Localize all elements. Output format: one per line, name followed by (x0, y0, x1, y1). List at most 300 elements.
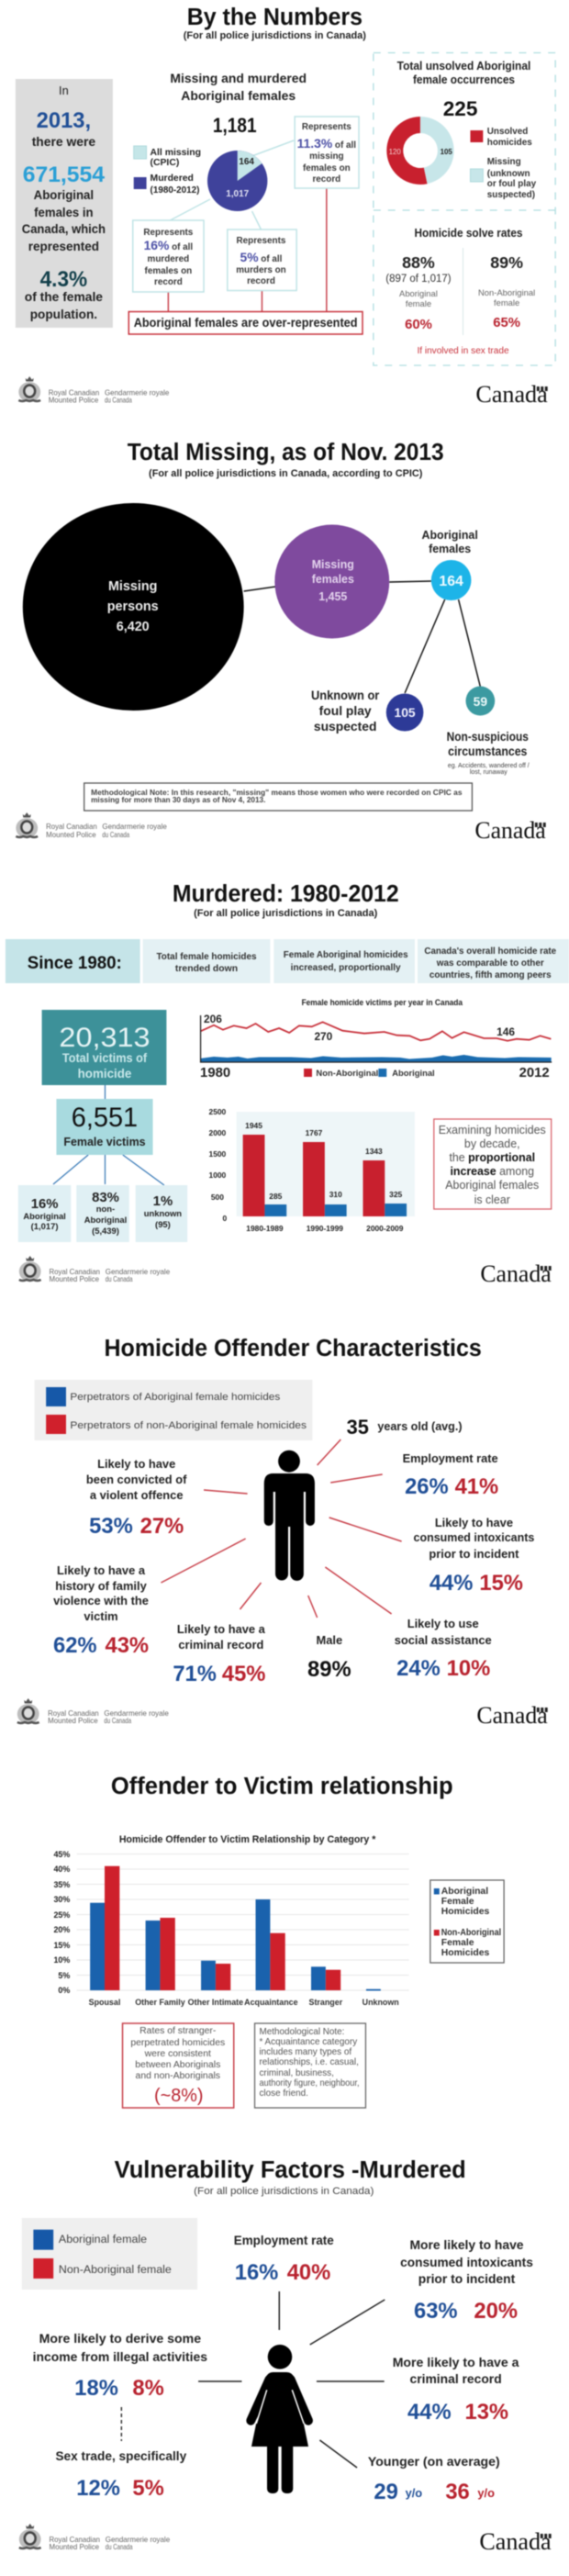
box: total victims: homicide (78, 1067, 132, 1081)
homicide solve rates: Aboriginal (399, 289, 438, 299)
callout: proportional increase (434, 1119, 552, 1209)
callout: proportional increase: increase among (450, 1165, 534, 1178)
logo: RCMP: du Canada (106, 1275, 133, 1283)
box: 16% aboriginal: 16% (31, 1196, 58, 1212)
stat: intoxicants: 15% (479, 1571, 523, 1596)
homicide solve rates (385, 227, 535, 356)
banner: trended down: Total female homicides (156, 952, 257, 962)
banner: increased: increased, proportionally (291, 963, 401, 973)
donut chart (386, 117, 454, 185)
stat: illegal income: 8% (132, 2376, 164, 2401)
donut legend: (unknown (487, 169, 530, 179)
stat: family violence: Likely to have a (57, 1563, 146, 1577)
subtitle: (For all police jurisdictions in Canada) (184, 30, 366, 41)
donut legend (470, 127, 537, 200)
bar chart (209, 1107, 415, 1233)
line chart: Female homicide victims per year in Canada (302, 998, 463, 1007)
callout: 11.3%: record (312, 174, 340, 185)
bar chart: 35% (53, 1880, 70, 1889)
logo: RCMP: Royal Canadian (48, 1709, 99, 1718)
bar chart: 285 (269, 1192, 283, 1201)
bar chart: Homicide Offender to Victim Relationship by Category * (119, 1834, 376, 1845)
chart legend: Non-Aboriginal (441, 1928, 501, 1938)
homicide solve rates: (897 of 1,017) (385, 272, 452, 285)
dotted link (120, 2407, 122, 2441)
stat: illegal income (33, 2331, 207, 2401)
box: 83% non-aboriginal: Aboriginal (84, 1215, 127, 1226)
homicide solve rates: 89% (490, 253, 523, 272)
stat: intoxicants: prior to incident (418, 2271, 516, 2286)
bar chart: 2500 (209, 1107, 227, 1116)
chart legend: Aboriginal (441, 1887, 488, 1897)
callout: 5%: 5% of all (240, 250, 283, 264)
stat: illegal income: 18% (74, 2376, 118, 2401)
bar chart: 1990-1999 (307, 1224, 343, 1233)
circle: foul play: foul play (319, 703, 372, 718)
legend: Perpetrators of non-Aboriginal female homicides (70, 1420, 307, 1431)
circle: missing females (274, 525, 389, 639)
pie chart: 1,017 (226, 189, 250, 199)
line chart: Non-Aboriginal (316, 1069, 378, 1079)
stat: employment: 26% (405, 1474, 449, 1499)
logo: RCMP: Royal Canadian (50, 2536, 100, 2544)
circle: aboriginal females: Aboriginal (422, 529, 478, 542)
box: 83% non-aboriginal: (5,439) (92, 1226, 119, 1237)
stat: criminal record (393, 2355, 519, 2425)
stat: employment: 40% (287, 2260, 330, 2285)
stat: age: y/o (406, 2486, 422, 2500)
line chart: 146 (496, 1025, 515, 1038)
circle: missing females: females (312, 573, 354, 586)
logo: RCMP: Mounted Police (50, 2543, 100, 2551)
methodological note (255, 2023, 365, 2108)
panel: unsolved occurrences (374, 53, 555, 365)
stat: age: y/o (477, 2486, 495, 2500)
methodological note: includes many types of (259, 2047, 351, 2057)
bar chart: 1000 (209, 1170, 227, 1180)
stat: age: 29 (374, 2480, 398, 2504)
bar chart: 2000-2009 (366, 1224, 404, 1233)
logo: Canada: Canada (479, 2528, 552, 2555)
callout: proportional increase: by decade, (464, 1137, 520, 1150)
section: murdered (6, 881, 569, 1287)
callout: stranger rates: were consistent (144, 2049, 211, 2059)
logo: RCMP: Gendarmerie royale (106, 1268, 171, 1276)
line chart: Aboriginal (392, 1069, 435, 1079)
methodological note: Methodological Note: (259, 2027, 344, 2037)
box: 1% unknown: (95) (155, 1220, 171, 1230)
banner: overall rate: was comparable to other (436, 958, 544, 969)
stat: intoxicants: More likely to have (409, 2237, 524, 2252)
circle: non-suspicious: lost, runaway (470, 769, 508, 776)
tree connectors (53, 1085, 164, 1185)
stat: family violence: 43% (105, 1633, 149, 1658)
stat: sex trade (55, 2448, 186, 2501)
connector lines (244, 581, 480, 693)
logo: RCMP: Gendarmerie royale (102, 823, 167, 831)
icon: female figure (251, 2345, 308, 2493)
bar chart: 1945 (245, 1121, 262, 1130)
stat: criminal record: 71% (173, 1662, 217, 1686)
logo: RCMP: du Canada (104, 1717, 132, 1725)
callout: stranger rates: perpetrated homicides (130, 2038, 225, 2048)
box: 16% aboriginal: Aboriginal (23, 1212, 66, 1222)
methodological note: Methodological Note: In this research, "missing" means those women who were recorded on CPIC as (91, 788, 463, 797)
bar chart: 0% (58, 1986, 70, 1995)
bar chart: Acquaintance (244, 1998, 298, 2007)
panel: population: females in (34, 206, 94, 219)
pie chart (207, 151, 267, 211)
box: total victims (42, 1010, 166, 1085)
chart legend: Homicides (441, 1948, 489, 1958)
methodological note: relationships, i.e. casual, (259, 2057, 359, 2067)
bar chart: 1767 (306, 1128, 323, 1137)
subtitle: (For all police jurisdictions in Canada) (194, 2186, 374, 2197)
callout: stranger rates: Rates of stranger- (139, 2026, 217, 2036)
box: 16% aboriginal: (1,017) (31, 1222, 58, 1232)
homicide solve rates: 60% (405, 317, 432, 332)
methodological note: authority figure, neighbour, (259, 2078, 360, 2089)
stat: family violence (53, 1563, 149, 1658)
stat: intoxicants: prior to incident (429, 1547, 519, 1561)
chart legend (430, 1880, 504, 1963)
circle: non-suspicious: Non-suspicious (447, 730, 529, 744)
bar chart: 325 (389, 1190, 402, 1199)
circle: missing persons (23, 503, 244, 711)
donut legend: Missing (487, 157, 521, 167)
box: total victims: Total victims of (62, 1051, 148, 1065)
box: 83% non-aboriginal (76, 1185, 129, 1242)
circle: missing persons: 6,420 (117, 620, 150, 634)
stat: criminal record: 44% (407, 2400, 452, 2425)
methodological note: close friend. (259, 2089, 308, 2099)
stat: sex trade: Sex trade, specifically (55, 2448, 186, 2463)
stat: employment: 16% (235, 2260, 278, 2285)
banner: overall rate: countries, fifth among peers (430, 970, 552, 980)
stat: employment: Employment rate (403, 1451, 498, 1465)
subtitle: (For all police jurisdictions in Canada) (194, 908, 378, 919)
panel: population: represented (28, 240, 99, 253)
total 1,181: 1,181 (213, 114, 257, 137)
logo: RCMP: Royal Canadian (46, 823, 97, 831)
callout: 16%: Represents (143, 228, 194, 238)
chart legend: Female (441, 1938, 474, 1948)
circle: non-suspicious (447, 687, 530, 776)
stat: violent offence: a violent offence (90, 1488, 184, 1502)
logo: RCMP: Mounted Police (50, 1275, 100, 1283)
stat: violent offence: been convicted of (86, 1473, 187, 1486)
pie legend: Murdered (151, 174, 194, 184)
circle: aboriginal females: 164 (439, 574, 463, 589)
bar chart: 30% (53, 1895, 70, 1904)
pie legend (134, 146, 201, 196)
methodological note: * Acquaintance category (259, 2037, 357, 2047)
logo: RCMP: du Canada (106, 2543, 133, 2551)
homicide solve rates: 65% (493, 315, 520, 330)
logo: RCMP (19, 1256, 171, 1283)
circle: non-suspicious: circumstances (448, 745, 527, 758)
logo: RCMP: Gendarmerie royale (105, 389, 170, 398)
stat: social assistance (395, 1617, 492, 1681)
methodological note (84, 783, 472, 811)
box: female victims: Female victims (63, 1135, 146, 1148)
stat: employment (403, 1451, 498, 1499)
bar chart: Other Intimate (188, 1998, 243, 2007)
logo: RCMP: du Canada (102, 831, 130, 839)
bar chart: 20% (53, 1925, 70, 1934)
heading: missing and murdered: Missing and murdered (170, 71, 307, 85)
box: 1% unknown: 1% (153, 1193, 173, 1209)
banner: overall rate (418, 939, 569, 983)
connector lines (198, 2291, 385, 2468)
connector lines (161, 1439, 402, 1618)
stat: intoxicants: Likely to have (435, 1516, 513, 1529)
panel: population: there were (32, 135, 96, 149)
bar chart: 5% (58, 1971, 70, 1980)
stat: illegal income: income from illegal activities (33, 2349, 207, 2364)
stat: criminal record: 13% (464, 2400, 508, 2425)
homicide solve rates: Non-Aboriginal (478, 288, 535, 298)
box: female victims: 6,551 (72, 1103, 138, 1133)
logo: RCMP: Gendarmerie royale (104, 1709, 169, 1718)
donut chart: 120 (389, 148, 401, 156)
logo: RCMP: Mounted Police (49, 396, 99, 405)
box: 1% unknown: unknown (144, 1209, 182, 1219)
stat: employment: 41% (455, 1474, 498, 1499)
banner: overall rate: Canada's overall homicide rate (424, 946, 556, 957)
pie legend: (1980-2012) (151, 185, 199, 196)
stat: age (347, 1416, 463, 1439)
heading: missing and murdered (170, 71, 307, 103)
logo: RCMP: Mounted Police (46, 831, 96, 839)
bar chart: Stranger (309, 1998, 343, 2007)
callout: proportional increase: the proportional (449, 1151, 535, 1164)
panel: population: In (59, 84, 69, 97)
bar chart: 45% (53, 1850, 70, 1859)
stat: violent offence: 53% (89, 1514, 133, 1539)
stat: intoxicants: 20% (474, 2299, 518, 2324)
callout: 11.3%: females on (303, 163, 351, 174)
callout: 11.3%: 11.3% of all (297, 136, 356, 151)
stat: intoxicants: 44% (430, 1571, 473, 1596)
bar chart: 10% (53, 1955, 70, 1965)
circle: foul play: Unknown or (311, 688, 380, 702)
circle: non-suspicious: eg. Accidents, wandered off / (448, 763, 530, 769)
box: 83% non-aboriginal: non- (96, 1204, 115, 1215)
stat: social assistance: social assistance (395, 1633, 492, 1647)
banner: trended down (143, 939, 270, 983)
bar chart: 15% (53, 1941, 70, 1950)
box: 16% aboriginal (18, 1185, 71, 1242)
legend: Perpetrators of Aboriginal female homicides (70, 1392, 281, 1403)
title: Vulnerability Factors -Murdered (115, 2157, 466, 2183)
stat: male: 89% (307, 1657, 351, 1682)
logo: RCMP: Royal Canadian (49, 389, 99, 398)
logo: RCMP (16, 812, 167, 839)
box: total victims: 20,313 (59, 1023, 151, 1053)
logo: RCMP (17, 1698, 169, 1725)
connector lines (170, 140, 294, 230)
panel: unsolved occurrences: female occurrences (413, 73, 515, 86)
panel: unsolved occurrences: 225 (443, 97, 477, 120)
callout: 16%: females on (145, 266, 192, 276)
panel: unsolved occurrences: Total unsolved Aboriginal (397, 60, 530, 73)
stat: employment (234, 2234, 334, 2285)
bar chart: Other Family (135, 1998, 185, 2007)
circle: missing females: 1,455 (318, 590, 347, 603)
donut chart: 105 (441, 148, 452, 156)
title: By the Numbers (187, 5, 363, 30)
stat: violent offence: 27% (140, 1514, 184, 1539)
stat: intoxicants: consumed intoxicants (400, 2255, 533, 2269)
banner: since 1980: Since 1980: (28, 954, 122, 973)
callout: 16% (133, 220, 204, 292)
callout: 16%: murdered (148, 254, 189, 264)
stat: social assistance: 10% (447, 1656, 490, 1681)
logo: RCMP (19, 2524, 171, 2551)
callout: 5% (228, 230, 296, 290)
callout: 11.3%: Represents (302, 122, 351, 132)
legend (35, 1380, 312, 1440)
pie legend: (CPIC) (151, 158, 179, 168)
donut legend: or foul play (487, 179, 537, 189)
logo: Canada: Canada (476, 1702, 548, 1729)
title: Total Missing, as of Nov. 2013 (128, 440, 444, 465)
stat: employment: Employment rate (234, 2234, 334, 2247)
stat: sex trade: 12% (76, 2476, 120, 2501)
circle: foul play (311, 688, 423, 734)
callout: 11.3%: missing (309, 151, 344, 162)
pie chart: 164 (239, 157, 254, 167)
panel: population (16, 79, 113, 328)
chart legend: Female (441, 1897, 474, 1907)
panel: population: Canada, which (22, 222, 106, 236)
banner: trended down: trended down (175, 964, 238, 974)
callout: over-represented: Aboriginal females are over-represented (134, 316, 358, 330)
bar chart: 1500 (209, 1149, 227, 1159)
donut legend: suspected) (487, 190, 535, 200)
legend: Non-Aboriginal female (59, 2263, 172, 2276)
homicide solve rates: female (406, 299, 431, 309)
panel: population: 2013, (37, 108, 91, 133)
section: total missing (16, 440, 546, 844)
line chart (200, 998, 552, 1081)
stat: social assistance: 24% (396, 1656, 441, 1681)
panel: population: of the female (25, 290, 104, 304)
stat: intoxicants (400, 2237, 533, 2324)
stat: male (307, 1633, 351, 1682)
stat: social assistance: Likely to use (407, 1617, 479, 1630)
callout: proportional increase: Examining homicides (439, 1124, 546, 1137)
stat: age: 36 (445, 2480, 470, 2504)
heading: missing and murdered: Aboriginal females (181, 88, 296, 103)
panel: population: Aboriginal (34, 188, 94, 202)
callout: 16%: record (154, 277, 183, 287)
stat: age (368, 2454, 500, 2504)
title: Murdered: 1980-2012 (173, 881, 399, 907)
bar chart: Unknown (363, 1998, 399, 2007)
bar chart: 2000 (209, 1128, 227, 1137)
stat: criminal record: Likely to have a (177, 1622, 266, 1636)
section: by the numbers (16, 5, 555, 408)
callout: 5%: record (247, 276, 275, 286)
subtitle: (For all police jurisdictions in Canada, according to CPIC) (149, 468, 423, 479)
homicide solve rates: If involved in sex trade (417, 346, 509, 356)
stat: criminal record: More likely to have a (393, 2355, 519, 2369)
stat: violent offence: Likely to have (97, 1457, 175, 1471)
stat: family violence: history of family (55, 1579, 148, 1593)
red connectors (168, 188, 327, 311)
homicide solve rates: Homicide solve rates (414, 227, 523, 240)
circle: aboriginal females: females (429, 543, 471, 555)
stat: intoxicants (414, 1516, 534, 1596)
circle: aboriginal females (422, 529, 478, 600)
stat: sex trade: 5% (132, 2476, 164, 2501)
callout: stranger rates (123, 2023, 234, 2108)
callout: proportional increase: is clear (474, 1193, 510, 1206)
circle: missing persons: persons (107, 599, 159, 614)
stat: intoxicants: 63% (414, 2299, 458, 2324)
callout: 5%: murders on (236, 265, 286, 275)
banner: increased: Female Aboriginal homicides (284, 950, 408, 960)
callout: over-represented (128, 312, 363, 334)
homicide solve rates: female (494, 298, 519, 308)
bar chart: 25% (53, 1910, 70, 1920)
methodological note: criminal, business, (259, 2068, 334, 2078)
section: offender to victim relationship (53, 1774, 504, 2108)
stat: age: Younger (on average) (368, 2454, 500, 2469)
logo: RCMP: Mounted Police (48, 1717, 98, 1725)
methodological note: missing for more than 30 days as of Nov 4, 2013. (91, 795, 265, 804)
bar chart: 500 (211, 1193, 224, 1202)
line chart: 1980 (200, 1065, 230, 1081)
callout: stranger rates: between Aboriginals (135, 2060, 220, 2070)
stat: male: Male (316, 1633, 342, 1647)
legend (22, 2218, 197, 2290)
bar chart: Spousal (89, 1998, 120, 2007)
circle: foul play: suspected (314, 719, 376, 734)
logo: RCMP: Royal Canadian (50, 1268, 100, 1276)
stat: age: years old (avg.) (377, 1420, 463, 1433)
stat: criminal record: criminal record (410, 2371, 502, 2386)
line chart: 270 (314, 1030, 333, 1043)
circle: foul play: 105 (395, 705, 416, 720)
circle: missing females: Missing (312, 558, 354, 571)
bar chart: 310 (329, 1190, 342, 1199)
stat: family violence: victim (84, 1609, 118, 1623)
line chart: 206 (204, 1013, 222, 1025)
stat: intoxicants: consumed intoxicants (414, 1530, 534, 1544)
bar chart: 1343 (365, 1147, 383, 1156)
stat: violent offence (86, 1457, 187, 1539)
logo: RCMP: du Canada (105, 396, 132, 405)
bar chart (53, 1834, 409, 2007)
panel: population: population. (30, 308, 97, 321)
panel: population: 4.3% (40, 267, 87, 292)
box: female victims (56, 1099, 153, 1155)
stat: criminal record: criminal record (178, 1638, 263, 1652)
callout: proportional increase: Aboriginal females (445, 1179, 539, 1192)
donut legend: Unsolved (487, 127, 528, 137)
icon: male figure (264, 1450, 315, 1581)
logo: RCMP (18, 376, 170, 405)
logo: RCMP: Gendarmerie royale (106, 2536, 171, 2544)
banner: increased (273, 939, 415, 983)
pie legend: All missing (151, 148, 201, 158)
callout: 11.3% (295, 117, 359, 188)
stat: age: 35 (347, 1416, 369, 1439)
logo: Canada: Canada (475, 381, 548, 408)
